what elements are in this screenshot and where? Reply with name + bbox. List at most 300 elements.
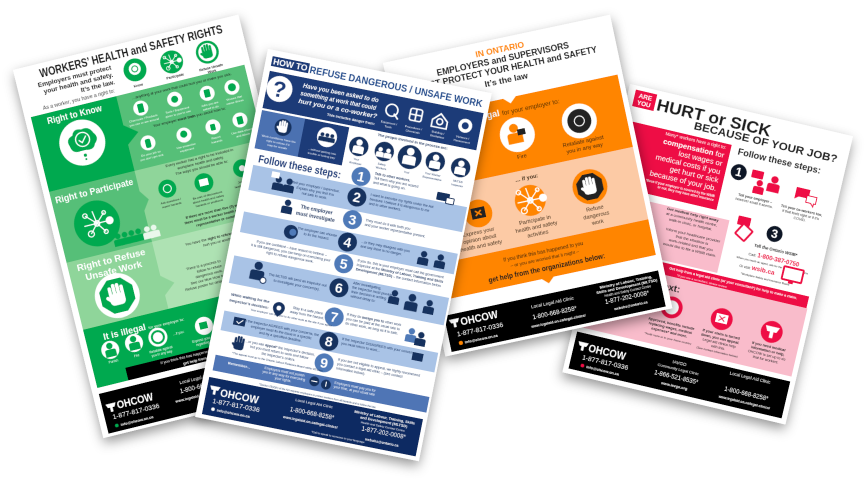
subtitle: employers must protect: It’s the law. [80,79,116,94]
left-hand step text: While waiting for the [231,292,271,304]
block: refuse conditions: may be unsafe [267,143,288,151]
people involved: Your [353,157,360,162]
left-hand step text: must investigate [295,211,335,224]
panel: right to refuse unsafe work: hurt you or another worker [203,233,248,248]
block: refuse conditions: Work conditions have the [261,133,296,144]
panel: next: Legal aid clinics help [702,337,736,349]
panel: it is illegal: you in any way [566,142,604,156]
how to badge: HOW TO [272,56,309,73]
banner: have you been asked: Procedures / [404,124,423,131]
left-hand step text: but you must return to work and follow [250,345,309,360]
step 3: tell the WSIB: Call: 1-800-387-0750 [748,251,800,269]
banner: have you been asked: Harassment [453,138,470,145]
panel: next: Next: [656,280,681,296]
footer: contacts [99,341,322,434]
block: refuse conditions: right to refuse if it [266,138,290,147]
panel: get medical help: walk-in clinic, or hospital. [669,217,713,232]
panel: right to know: and labels [236,131,251,139]
panel: if you [417,147,648,265]
panel: right to participate: report hazards [162,201,182,209]
panel: if you: health and safety [460,239,503,254]
heading: follow these steps: Follow these steps: [257,153,342,181]
right-hand step text: information below). [336,366,366,376]
remember band: Employers must pay you for [334,381,377,393]
banner: have you been asked: ? [270,76,288,103]
top icons: know, participate, refuse: Participate [166,72,184,81]
right-hand step text: because I believe it is dangerous to me [369,197,430,213]
panel: right to participate [49,139,280,263]
panel: right to know: you don’t get sick [140,152,164,162]
panel: right to participate: Be part of discussions [192,190,223,201]
banner: have you been asked [262,71,484,150]
panel: compensation: get hurt or sick [669,164,720,185]
poster: workers' health and safety rights (green) [13,15,329,438]
left-hand step text: Explain why you feel it is [296,186,335,197]
left-hand step text: it is still dangerous, you can keep on exercising your [251,243,332,263]
footer: contacts: OHCOW [459,309,500,328]
people involved: Employer [349,160,362,166]
panel: right to participate: If there are more than five (5) workers, [185,201,249,220]
footer: contacts: 1-877-817-0336 [112,404,161,421]
step number circles: 7 [329,308,340,326]
right-hand step text: and to other workers. [369,202,402,212]
step number circles: 2 [352,188,363,206]
panel: it is illegal: It is illegal for your employer to: [456,95,560,127]
panel: right to know: asked to do [203,104,219,112]
panel: right to refuse unsafe work [67,210,297,330]
panel: it is illegal: It is illegal for your employer to: [102,313,185,342]
panel: if you: dangerous [583,210,610,222]
right-hand step text: you contact a legal aid clinic – (see contact [337,362,403,379]
left-hand step text: not safe to work. [301,191,327,200]
step icons [228,158,459,386]
poster: how to refuse dangerous / unsafe work (blue) [195,49,492,461]
panel: right to refuse unsafe work: follow to refuse [196,264,222,274]
right-hand step text: you can be paid at the usual rate to [346,317,400,331]
panel: right to refuse unsafe work: Refuse poster for details [185,278,226,292]
panel: right to refuse unsafe work: See our blue How to [190,274,225,286]
panel: right to know: equipment [180,146,195,153]
step 1: 1 [734,165,744,180]
panel: compensation: medical costs if you [655,152,721,176]
panel: it is illegal: Fire [134,353,140,358]
step 1: COVID. [793,216,806,223]
title: It’s the law [484,71,530,89]
band: legal aid clinic [593,247,809,308]
panel: get medical help: that the situation is [675,234,709,246]
banner: have you been asked: Tools [384,124,393,130]
footer: contacts: Ministry of Labour, Training, [599,274,653,290]
panel: compensation: because of your job. [649,168,717,193]
footer: contacts [444,270,666,352]
step 3: tell the WSIB: When you reach an agent, ask for the telephone claim form [736,255,809,276]
panel: right to refuse unsafe work: You have the right to refuse if you think it may [185,224,263,247]
step number circles: 3 [347,211,358,228]
left-hand step text: Tell your employer / supervisor. [292,180,340,194]
footer: contacts: www.iavgo.org [660,381,688,391]
panel: it is illegal [401,74,633,193]
footer: contacts: info@ohcow.on.ca [465,333,499,345]
remember band: Remember... [228,361,250,370]
right-hand step text: Talk to other workers. [374,172,411,183]
panel: it is illegal: Retaliate against [562,135,605,149]
right-hand step text: If the Inspector DISAGREES with your concerns, [342,337,417,356]
panel: right to refuse unsafe work: Right to Refuse [76,247,147,274]
banner: have you been asked: something at work that could [300,90,377,112]
panel: if you: work [591,219,605,227]
footer: contacts: info@ohcow.on.ca [586,365,620,377]
left-hand step text: away from the hazard. [290,310,324,320]
subtitle: employers must protect: Employers must protect [37,64,113,89]
footer: contacts: OHCOW [587,343,627,363]
panel: get help: If you think this has happened to you [503,241,584,264]
panel: if you: Refuse [586,204,604,214]
people involved: Your Worker [425,171,441,178]
are you badge: ARE [638,93,653,103]
people involved: Inspector [451,182,463,188]
panel: next: If your claim is turned [702,328,741,341]
top icons: know, participate, refuse [121,38,224,94]
panel: right to know: Do your job so [141,149,161,158]
title: HURT or SICK [655,95,774,141]
panel: it is illegal: Express your opinion [192,333,222,344]
step number circles: 9 [319,354,330,372]
poster: are you hurt or sick (pink) [562,84,853,424]
people involved: MLTSD [453,179,463,184]
footer: contacts: Local Legal Aid Clinic [295,397,333,409]
panel: right to participate: health and safety [234,180,258,189]
footer: contacts: IAVGO [672,359,687,367]
footer: contacts: webohs@ontario.ca [613,300,649,311]
step number circles: 6 [334,279,345,296]
footer: contacts: www.legalaid.on.ca/legal-clinics/ [717,394,770,410]
panel: compensation: lost wages or [678,149,724,168]
footer: contacts: 1-877-817-0336 [581,355,629,372]
are you badge [632,89,657,111]
block: refuse conditions [254,110,305,157]
panel: right to know: Chemicals / Products [129,113,158,124]
footer: contacts: webohs@ontario.ca [260,370,298,383]
right-hand step text: do other work, as long as it is safe. [345,321,398,336]
footer: contacts: 1-866-521-8535* [653,370,699,386]
right-hand step text: After investigating, [353,281,382,291]
step 3: tell the WSIB [726,215,818,290]
block: talk to others: ...without getting into [308,147,337,156]
people involved: Representative [422,174,442,182]
right-hand step text: I want to exercise my rights under the Act [370,193,434,209]
banner: have you been asked: Equipment / [380,119,398,126]
left-hand step text: Inspector’s decision: [229,297,269,310]
panel: right to refuse unsafe work: Unsafe Work [84,259,144,283]
panel: next: *Audit more or in your home country [644,331,692,346]
footer: contacts: Local Legal Aid Clinic [531,295,575,309]
footer: contacts: 1-877-202-0008* [361,426,407,441]
panel: it is illegal: Retaliate against [149,345,173,355]
people involved: Workers [375,165,387,171]
footer: contacts: 1-877-202-0008* [605,291,651,306]
remember band: your rights. [274,376,292,383]
step 3: tell the WSIB: Or visit: wsib.ca [739,262,776,277]
panel: get medical help: Inform your healthcare provider [666,226,721,244]
footer: contacts: 1-800-668-8258* [289,407,335,422]
remember band [213,355,429,413]
people involved: You! [404,170,410,175]
panel: it is illegal: If you think this has happened to you – or you are worried it might – [160,334,272,365]
step number circles [312,165,373,374]
panel: right to know: Tools / Equipment [165,105,190,115]
left-hand step text: Your employer can ask you to do other work at the site if you agree [250,308,333,328]
panel: it is illegal: Punish [108,358,119,365]
panel: right to participate: Right to Participate [54,177,135,206]
footer: contacts: *Call to speak to someone in your language [311,430,365,444]
footer: contacts: Community Legal Clinic [657,362,699,376]
right-hand step text: ...or they may disagree with you [361,240,410,253]
title: REFUSE DANGEROUS / UNSAFE WORK [309,64,484,110]
footnote: *Section 25(2)(h) of the Act requires employers to protect workers from all hazards and to follow the law. [259,382,377,409]
panel: next: Approved, benefits include [648,316,695,331]
footer: contacts: 1-800-668-8258* [179,379,225,395]
panel: right to know: Report [211,134,221,141]
banner: have you been asked: hurt you or a co-worker? [298,98,378,121]
people involved [345,128,474,189]
right-hand step text: without delay to: [350,294,376,303]
right-hand step text: If they do assign you to other work [347,312,402,327]
panel: get help [432,219,657,306]
panel: right to know: Use protective [176,142,196,150]
panel: get medical help: would like to file a WSIB claim. [663,241,717,258]
are you badge: YOU [636,100,652,110]
heading: follow these steps: Follow these steps: [737,147,822,176]
left-hand step text: If you are confident – have reason to believe – [256,239,327,257]
footer: contacts: info@ohcow.on.ca [216,408,251,419]
left-hand step text: and by a specified deadline. [259,331,302,343]
panel: right to participate: The ways you should be able to: [175,159,229,176]
panel: next: (See contact information below) [696,345,738,359]
right-hand step text: and what is going on. [373,180,406,191]
panel: if you: activities [527,229,549,240]
panel: get medical help: Get medical help right away [667,206,720,223]
footer: contacts: Skills and Development (MLTSD) [596,277,658,295]
left-hand step text: The employer can choose [297,226,338,238]
footer: contacts: Local Legal Aid Clinic [729,370,772,385]
panel: get medical help: at a community health centre, [666,211,718,228]
footer: contacts: Ministry of Labour, Training, Skills [354,410,415,426]
panel: if you: health and safety [515,220,558,235]
subtitle: employers must protect [37,64,117,104]
step number circles: 4 [342,234,353,251]
right-hand step text [336,172,462,387]
step number circles: 5 [338,255,349,272]
panel: compensation: Many* workers have a right to: [665,131,727,150]
panel: next: replacing wages, medical [648,321,692,335]
right-hand step text: and say there is no danger. [360,244,402,256]
right-hand step text: They must do it with both you [365,218,411,231]
footer: contacts: Local Legal Aid Clinic [179,370,221,385]
left-hand step text: *The appeal must go to the Ontario Labour Relations Board within 30 days [232,351,324,373]
title: WORKERS’ HEALTH and SAFETY RIGHTS [38,22,224,81]
panel: right to know: cause illness [226,98,245,106]
footer: contacts: www.legalaid.on.ca/legal-clinics/ [530,313,586,329]
left-hand step text: employer must fix the issue in a specific [251,325,312,340]
right-hand step text: and your worker representative present. [364,223,426,239]
block: talk to others [298,119,349,166]
banner: have you been asked: Have you been asked to do [302,83,379,104]
step bands [220,165,467,372]
block: talk to others: trouble or losing pay [307,151,336,160]
banner: have you been asked: Workplace [430,133,445,140]
step 1: if that feels right or if it’s [782,209,820,221]
footer: contacts: 1-800-668-8258* [724,387,769,403]
panel: next: OHCOW is set up to do [747,349,786,362]
people involved: The people involved in the process are: [377,133,448,151]
step 3: tell the WSIB: 3 [770,226,780,242]
panel: right to participate: about health and safety [192,193,225,205]
footer: contacts: and Development (MLTSD) [360,415,408,429]
subtitle: BECAUSE OF YOUR JOB? [693,120,839,166]
title: MUST PROTECT YOUR HEALTH and SAFETY [416,44,598,92]
step 1: however small it seems. [735,197,773,209]
panel: it is illegal [83,277,311,388]
right-hand step text: If you are not eligible to appeal, we highly recommend [338,358,421,378]
top icons: know, participate, refuse: Know [133,82,144,89]
footer: contacts: www.legalaid.on.ca/legal-clinics/ [174,386,234,404]
panel: right to participate: there must be a worker health and safety [184,205,253,225]
step number circles: 8 [323,333,334,350]
panel: if you: Express your [462,227,495,239]
panel: it is illegal: regarding health [196,338,219,347]
panel: compensation: compensation for [662,137,726,160]
right-hand step text: If you do, this is your employer must call the government [357,258,444,279]
panel: if you: Participate in [519,215,552,227]
band: legal aid clinic: Get help from a legal aid clinic (or your consultant*) for help to make a claim. [669,266,798,300]
panel: right to know: given to you to use [165,109,192,119]
footer: contacts [202,377,423,456]
step 1: Tell your co-workers too, [781,204,823,217]
banner: have you been asked: Violence / [455,134,470,141]
panel: get medical help [596,192,729,273]
panel: next: down, you can appeal. [701,332,740,345]
footer: contacts [568,331,790,418]
panel: get help: get help from the organizations below: [488,253,606,285]
top icons: know, participate, refuse: Refuse Unsafe [199,63,223,73]
footer: contacts: webohs@ontario.ca [364,437,400,448]
intro line: As a worker, you have a right to: [42,88,116,112]
panel: compensation: *Even if your employer is covered by the WSIB [645,178,716,198]
left-hand step text: ...or you can appeal* the inspector’s decision, [245,339,315,357]
footer: contacts: OHCOW [219,387,260,407]
footer: contacts: Ministry of Labour [259,353,291,366]
top icons: know, participate, refuse: Work [207,69,217,75]
panel: right to refuse unsafe work: dangerous work. [195,269,223,279]
panel: next: with this. [711,344,726,351]
footer: contacts: OHCOW [116,391,155,412]
people involved: Safety [377,162,387,167]
banner: have you been asked: Building / [431,129,445,136]
banner: have you been asked: This includes danger from: [327,113,375,126]
step number circles: 1 [356,168,367,185]
panel: next: If you need medical [752,341,786,352]
right-hand step text: their decision in writing [351,290,387,301]
panel: compensation [610,120,732,210]
panel: right to know: you use or are around [129,117,160,128]
panel: right to know: hazards [211,138,223,145]
panel: it is illegal: …if you: [172,330,185,336]
panel: next [577,258,807,377]
right-hand step text: you must return to work... [341,341,380,353]
footer: contacts: Health and Safety Contact Centre [360,420,406,433]
left-hand step text: The employer [300,204,333,217]
footer: contacts: www.legalaid.on.ca/legal-clinics/ [282,415,338,430]
left-hand step text: to investigate your concern(s). [273,279,320,292]
footer: contacts: Health and Safety Contact Centre [604,284,652,298]
panel: right to know: Use data sheets [231,126,254,136]
panel: compensation: or not, they may have other insurance [657,185,714,202]
footer: contacts: info@ohcow.on.ca [120,415,155,427]
title: EMPLOYERS and SUPERVISORS [436,40,570,78]
panel: right to participate: workplace health and safety. [177,155,224,171]
step 3: tell the WSIB: *Workplace Safety and Insurance Board [740,271,790,287]
heading: in Ontario: IN ONTARIO [475,39,525,59]
panel: if you: … if you: [515,173,539,184]
right-hand step text: inspector at the Ministry of Labour, Training and Skills [356,263,444,284]
panel: right to participate: Every worker has a right to be included in [165,148,234,168]
subtitle: employers must protect: your health and safety. [43,72,114,96]
panel: right to know: Right to Know [46,103,104,127]
panel: next: information or help, [750,345,785,357]
left-hand step text: The MLTSD will send an inspector out [268,272,327,288]
panel: right to participate: committee [240,185,255,192]
footer: contacts: 1-877-202-0008* [254,360,300,377]
panel: next: expenses* and more. [651,326,688,339]
right-hand step text: Development (MLTSD) – the contact information below. [356,267,442,288]
step 3: tell the WSIB: Tell the Ontario WSIB* [754,243,798,258]
step 1: Tell your employer – [738,193,772,205]
left-hand step text [219,173,359,373]
panel: right to know: Your employer must train you about how to: [153,106,226,128]
panel: right to know: Jobs you are [201,100,219,108]
left-hand step text: Stay in a safe place [293,306,323,316]
poster: in Ontario employers and supervisors (orange) [383,15,672,356]
panel: get medical help: work-related and that you [668,237,713,252]
remember band: your time, at your usual rate [333,385,375,397]
left-hand step text: the inspector’s orders. [261,352,296,362]
footer: contacts: 1-877-817-0336 [212,399,261,414]
footer: contacts: 1-877-817-0336 [457,323,505,338]
right-hand step text: Tell them why you are scared [374,176,419,189]
left-hand step text: right to refuse dangerous work. [266,251,314,264]
panel: it is illegal: Fire [517,153,527,161]
banner: have you been asked: Chemicals [405,128,421,135]
panel: right to participate: representative or committee [196,212,244,228]
panel: right to know: Viruses that [226,94,243,102]
panel: it is illegal: you in any way [151,349,173,358]
left-hand step text: If the Inspector AGREES with your concerns, the [245,319,320,337]
right-hand step text: the inspector must provide [352,285,393,297]
panel: right to know: …anything at your work that could hurt you or make you sick. [131,72,232,100]
panel: right to refuse unsafe work: There is a process to [186,259,221,271]
panel: if you: opinion about [463,233,497,246]
panel: right to know [31,65,263,192]
panel: get help: – or you are worried that it might – [510,249,580,268]
footer: contacts: 1-800-668-8258* [532,306,578,321]
band: legal aid clinic: *If you use a consultant, please review [677,273,728,289]
panel: right to participate: hazards or problems [195,198,224,208]
remember band: Employers must not punish [264,366,305,378]
panel: it is illegal: get help from the organizations below: [183,345,251,366]
panel: next: that for workers. [752,355,779,365]
panel: right to participate: Ask questions / [160,197,182,206]
panel: right to participate: Join a joint [237,177,253,185]
